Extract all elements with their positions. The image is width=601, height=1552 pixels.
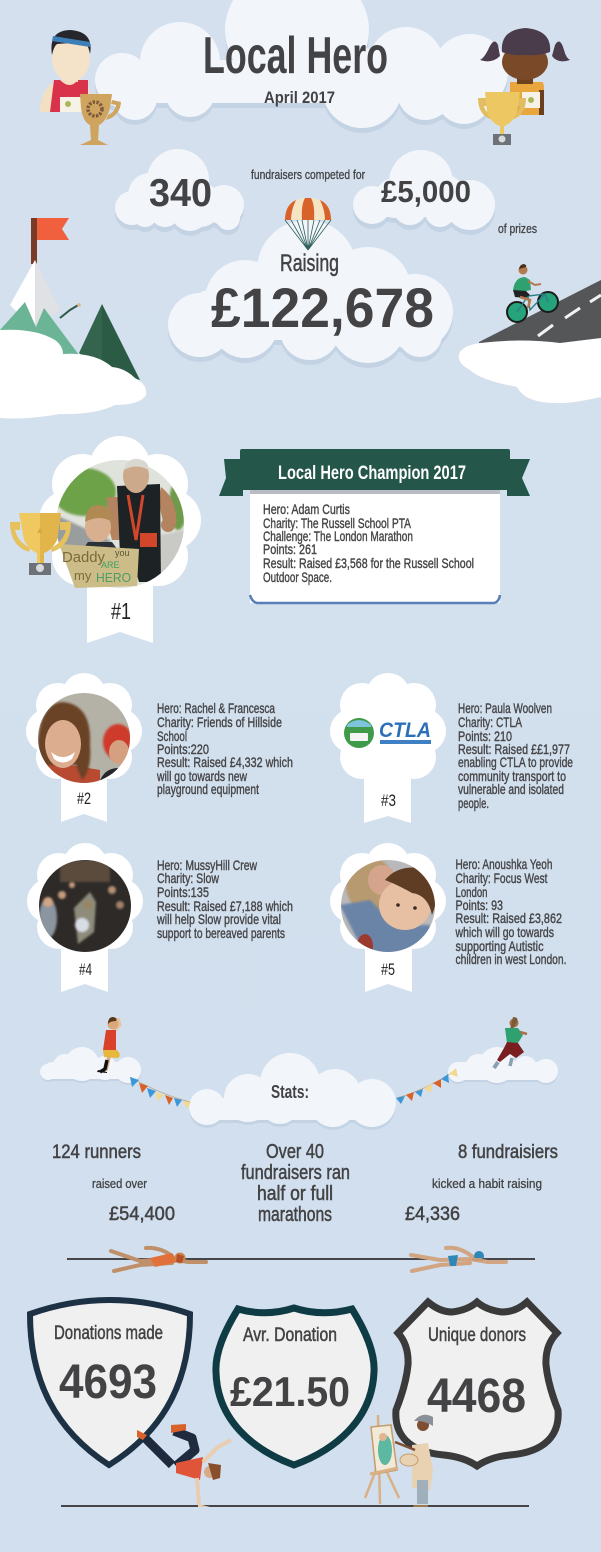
cloud: left white [0,330,146,418]
icon: mountains with flag and climber [0,218,140,380]
photo: MussyHill Crew [39,860,131,952]
rank: #1: #1 [111,598,131,624]
photo: Adam Curtis and son: ARE [101,560,120,570]
text: hero 4 details [156,857,293,941]
stat: total raised: £122,678 [211,276,434,339]
text: hero 5 details: Points: 93 [456,897,503,913]
text: hero 2 details: Result: Raised £4,332 which [157,754,293,770]
icon: swimmer right [411,1248,506,1271]
rosette: #1 [39,436,201,643]
text: hero 3 details: Hero: Paula Woolven [458,700,552,716]
shield: average donation: £21.50 [230,1368,350,1415]
stat: 124 runners: 124 runners [52,1142,141,1163]
logo: CTLA: CTLA [379,719,431,742]
shield: unique donors: Unique donors [428,1325,526,1346]
text: hero 3 details: community transport to [458,768,566,784]
title: Local Hero [203,27,388,85]
text: hero 3 details: vulnerable and isolated [458,781,564,797]
icon: swimmer left [111,1248,206,1271]
shield: unique donors [396,1302,558,1466]
subtitle date: April 2017 [264,88,335,107]
stat: 8 fundraisers [405,1142,558,1225]
banner ribbon ends [219,459,530,496]
stat: 5000: £5,000 [381,174,471,209]
text: hero 3 details: Result: Raised ££1,977 [458,741,570,757]
shield: donations made: Donations made [54,1323,163,1344]
icon: male runner with bronze trophy [40,30,121,145]
rosette: #2 [26,673,142,822]
text: champion details [263,501,474,585]
stat: 8 fundraisers: kicked a habit raising [432,1176,542,1191]
stat: over 40 fundraisers [241,1141,350,1226]
shield: donations made: 4693 [59,1356,157,1409]
text: champion details: Result: Raised £3,568 for the Russell School [263,555,474,571]
icon: running woman [494,1017,527,1068]
text: hero 2 details: playground equipment [157,781,259,797]
logo: CTLA [344,718,431,748]
rosette: #3 [330,673,446,823]
rosette: #4 [27,843,143,992]
text: hero 2 details: Hero: Rachel & Francesca [157,700,275,716]
photo: Adam Curtis and son: my [74,568,92,583]
cloud: raising [168,220,453,363]
bunting: right [396,1068,458,1104]
photo: Rachel and Francesca [38,693,130,783]
text: hero 5 details: which will go towards [455,924,554,940]
cloud: stats [189,1053,396,1127]
shield: unique donors: 4468 [427,1370,526,1423]
rank: #3: #3 [381,791,396,810]
text: champion details: Outdoor Space. [263,569,332,585]
shield: average donation [216,1308,374,1465]
divider: swim line [67,1258,535,1260]
text: hero 5 details: London [456,884,488,900]
photo: Anoushka Yeoh and child [341,860,435,952]
stat: over 40 fundraisers: half or full [257,1183,333,1205]
text: champion details: Challenge: The London Marathon [263,528,413,544]
text: raising: Raising [280,250,339,277]
text: hero 5 details: supporting Autistic [456,938,544,954]
text: hero 5 details: Result: Raised £3,862 [456,910,562,926]
icon: cyclist [507,264,558,322]
text: hero 5 details: Hero: Anoushka Yeoh [456,856,552,872]
photo: Adam Curtis and son: HERO [96,570,131,585]
stat: 340: 340 [149,172,212,215]
stat: 124 runners [52,1142,175,1225]
rank: #2: #2 [77,789,91,808]
text: hero 4 details: Points:135 [157,884,209,900]
text: hero 4 details: support to bereaved parents [157,925,285,941]
text: hero 2 details [156,700,293,797]
photo: Adam Curtis and son [52,458,187,590]
cloud: title [95,0,508,128]
banner heading [240,449,510,490]
cloud: 5000 [353,150,495,230]
bunting: left [130,1077,191,1109]
icon: road [479,280,601,345]
icon: running boy [97,1017,120,1073]
icon: painter and easel [365,1415,433,1507]
text: hero 2 details: will go towards new [156,768,248,784]
rosette: #5 [330,843,446,992]
stat: 124 runners: £54,400 [109,1204,175,1225]
text: hero 4 details: Hero: MussyHill Crew [157,857,258,873]
photo: Adam Curtis and son: Daddy [62,549,105,566]
heading: stats: Stats: [271,1082,309,1102]
photo: Adam Curtis and son: you [115,548,130,558]
banner heading: Local Hero Champion 2017 [278,463,466,484]
text: hero 4 details: will help Slow provide vital [156,911,281,927]
text: hero 4 details: Result: Raised £7,188 which [157,898,293,914]
text: hero 2 details: School [157,728,187,744]
rank: #4: #4 [79,960,92,979]
shield: average donation: Avr. Donation [243,1325,337,1346]
stat: 124 runners: raised over [92,1176,148,1191]
cloud: 340 [115,149,244,231]
text: hero 3 details: people. [458,795,489,811]
text: hero 5 details: Charity: Focus West [456,870,548,886]
text: hero 2 details: Points:220 [157,741,209,757]
panel: champion [219,449,530,603]
text: hero 2 details: Charity: Friends of Hillside [157,714,282,730]
shield: donations made [30,1300,190,1465]
stat: 8 fundraisers: £4,336 [405,1204,460,1225]
text: hero 5 details [455,856,566,967]
stat: over 40 fundraisers: fundraisers ran [241,1162,350,1184]
stat: 8 fundraisers: 8 fundraisiers [458,1142,558,1163]
stat: over 40 fundraisers: Over 40 [266,1141,324,1163]
text: champion details: Hero: Adam Curtis [263,501,350,517]
text: hero 3 details [458,700,573,811]
cloud: small left [40,1047,141,1083]
icon: parachute [285,198,331,250]
stat: over 40 fundraisers: marathons [258,1204,332,1226]
text: hero 3 details: Points: 210 [458,728,512,744]
cloud: small right [448,1047,558,1083]
rank: #5: #5 [381,960,395,979]
ground line [61,1505,529,1507]
icon: girl with gold trophy [478,28,570,145]
icon: gold trophy [10,513,71,575]
text: hero 4 details: Charity: Slow [157,870,220,886]
icon: breakdancer [137,1424,231,1507]
cloud: right white [459,338,601,403]
text: fundraisers competed for: fundraisers competed for [251,167,366,182]
text: of prizes: of prizes [498,221,537,236]
text: hero 3 details: Charity: CTLA [458,714,522,730]
text: champion details: Points: 261 [263,541,317,557]
text: champion details: Charity: The Russell School PTA [263,515,411,531]
